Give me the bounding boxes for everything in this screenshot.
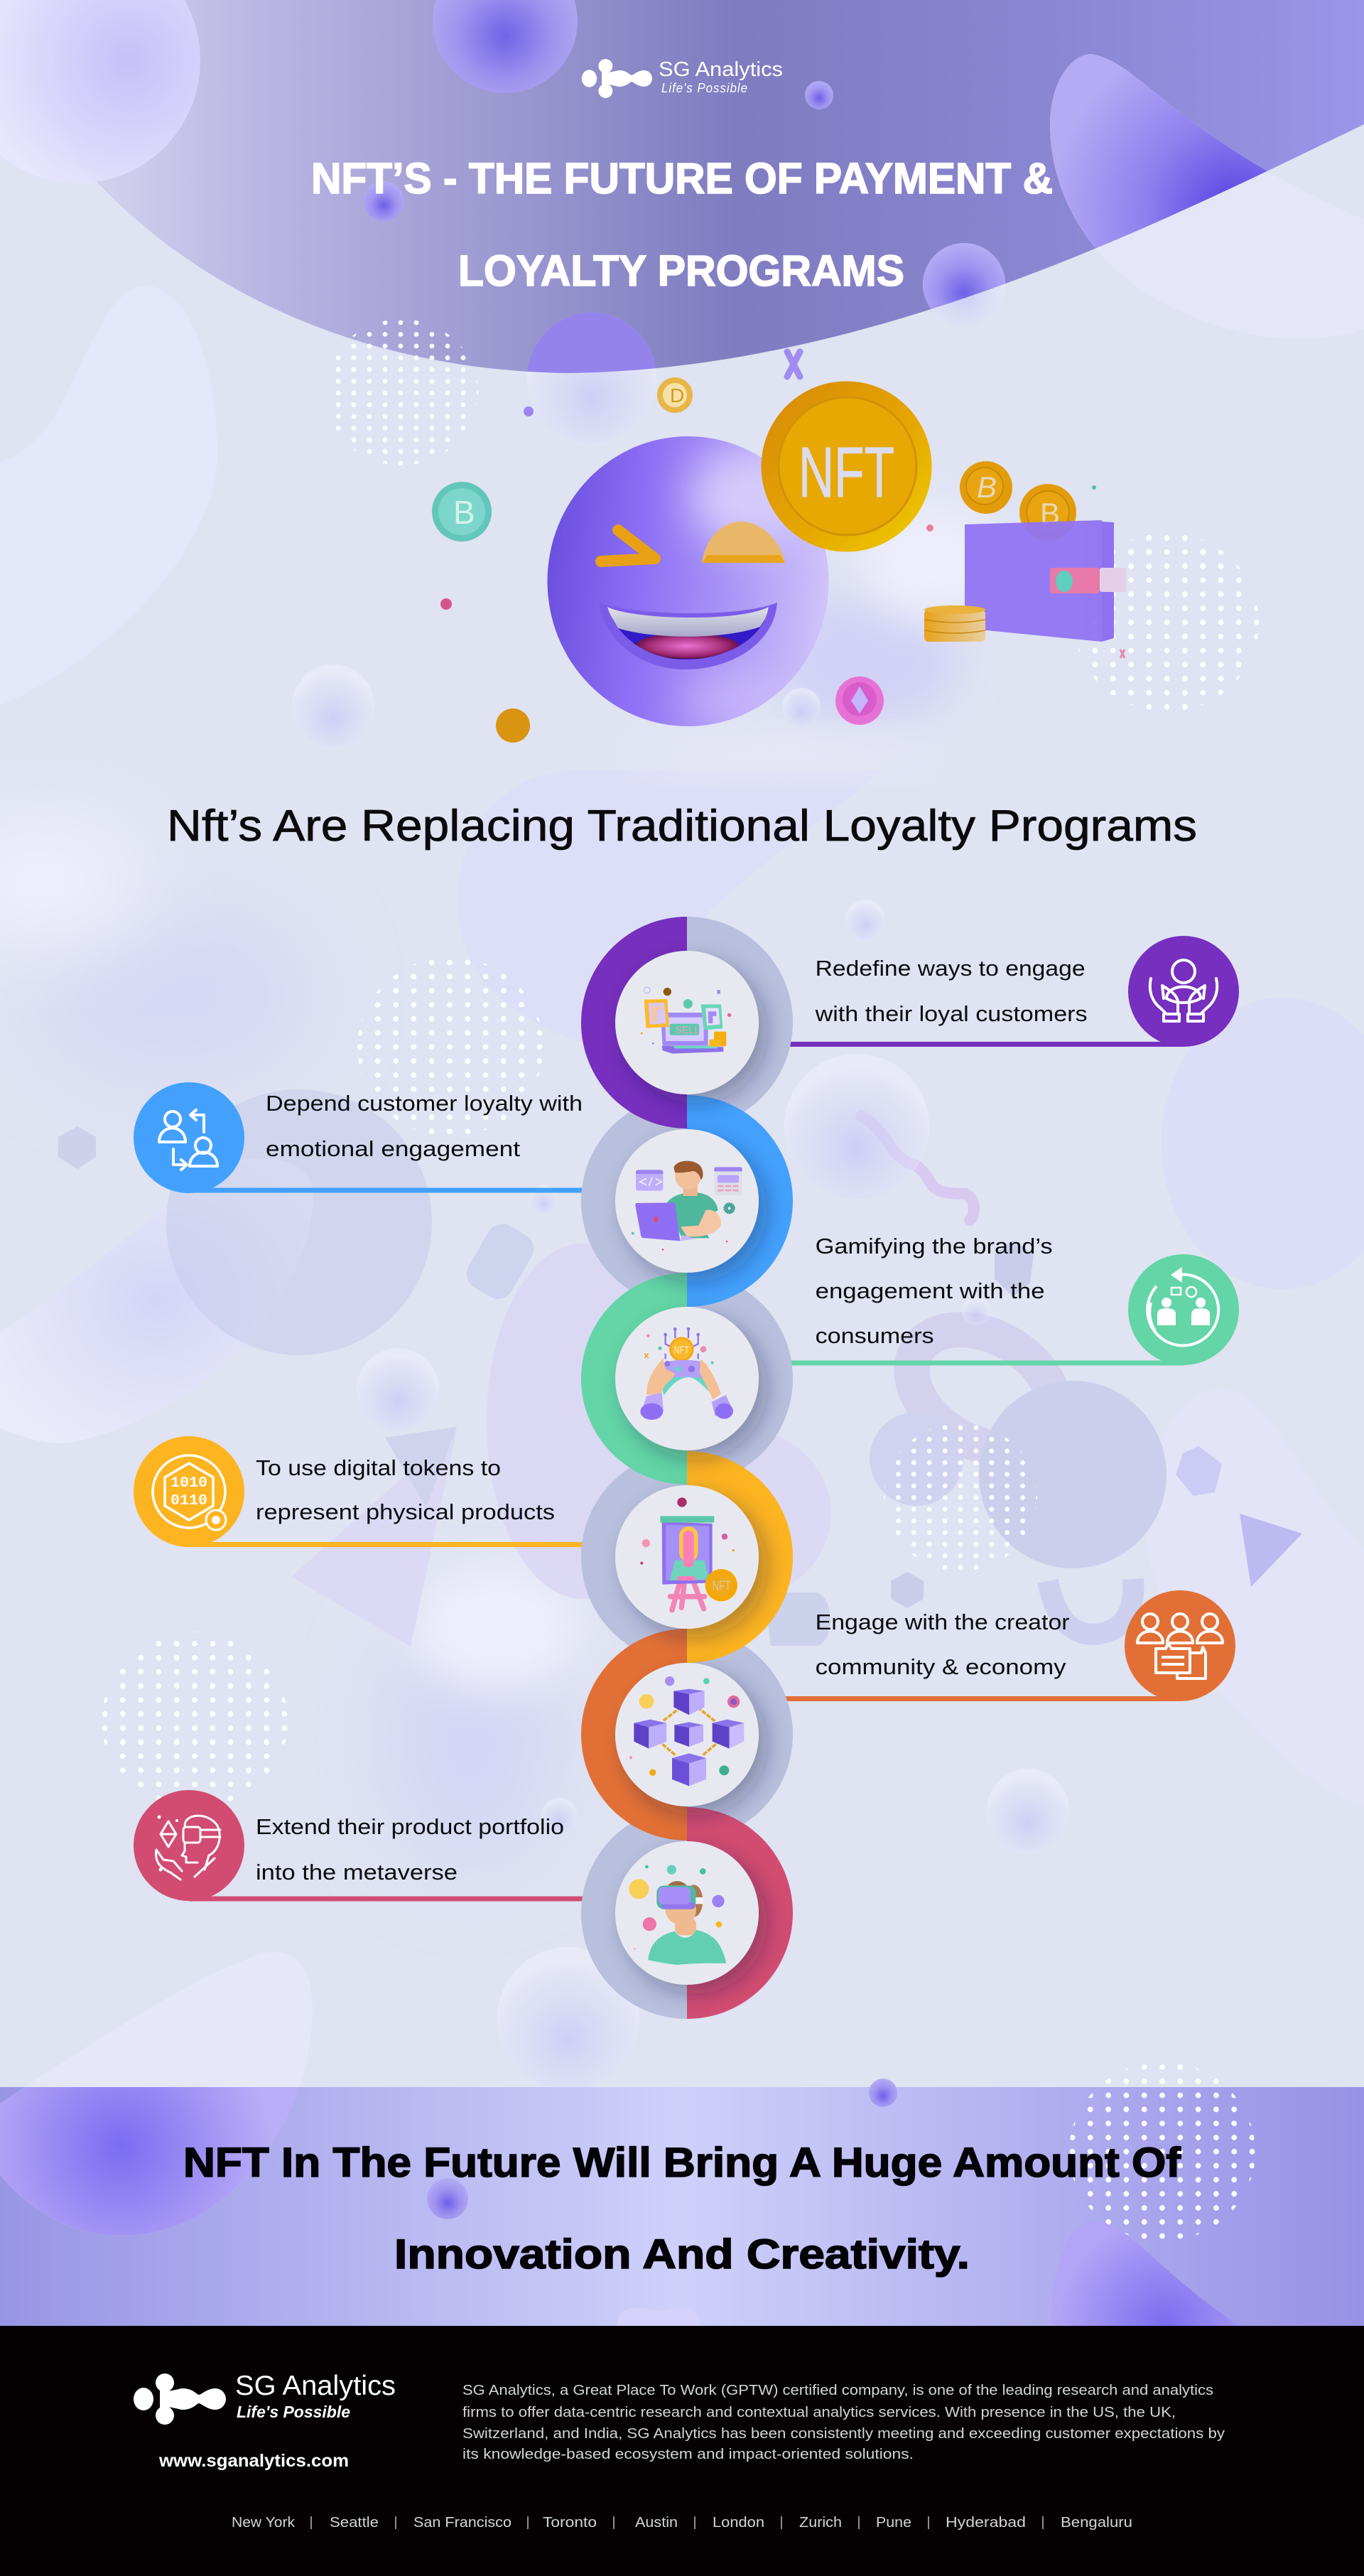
footer city list: Bengaluru xyxy=(1061,2515,1132,2531)
background shapes: hero section xyxy=(0,286,1002,770)
illustration: laptop selling NFTs: SELL xyxy=(676,1024,700,1035)
callout: depend: Depend customer loyalty with xyxy=(266,1091,583,1116)
top band blobs and bubbles xyxy=(0,0,1364,747)
callout: depend: emotional engagement xyxy=(266,1136,520,1161)
coin in wallet xyxy=(1019,484,1076,541)
footer description: SG Analytics, a Great Place To Work (GPTW) certified company, is one of the leading research and analytics xyxy=(462,2383,1213,2398)
illustration: gamepad held by hands xyxy=(640,1327,733,1420)
NFT coin: NFT xyxy=(799,433,894,512)
footer city list: San Francisco xyxy=(413,2515,512,2531)
logo tagline: Life's Possible xyxy=(661,81,748,95)
small bubble xyxy=(782,688,821,726)
illustration: gamepad held by hands: NFT xyxy=(674,1344,689,1356)
callout: creator: Engage with the creator xyxy=(816,1610,1070,1634)
callout: tokens: represent physical products xyxy=(256,1499,555,1524)
footer wordmark: SG Analytics xyxy=(235,2371,396,2401)
small gold coin xyxy=(657,377,693,413)
inner discs xyxy=(615,951,759,1985)
bottom band blobs xyxy=(0,1952,1240,2326)
wallet clasp xyxy=(1050,568,1126,593)
background shapes: middle section xyxy=(0,771,1364,2089)
callout: tokens: To use digital tokens to xyxy=(256,1455,501,1480)
callout: depend xyxy=(266,1091,583,1161)
callout: redefine: with their loyal customers xyxy=(814,1001,1088,1026)
footer description: its knowledge-based ecosystem and impact-oriented solutions. xyxy=(462,2447,914,2462)
callout: gamifying: engagement with the xyxy=(816,1278,1045,1303)
footer city list: London xyxy=(713,2515,764,2531)
callout: metaverse: Extend their product portfolio xyxy=(256,1814,564,1839)
callout: tokens xyxy=(256,1455,555,1524)
footer panel xyxy=(0,2326,1364,2576)
teal bitcoin coin: B xyxy=(453,494,475,531)
footer city list: Toronto xyxy=(543,2515,597,2531)
callout: gamifying: consumers xyxy=(816,1323,934,1348)
footer city list xyxy=(232,2515,1132,2531)
icon: caring hands (purple) xyxy=(1128,936,1239,1047)
footer city list: Pune xyxy=(876,2515,911,2531)
logo wordmark: SG Analytics xyxy=(659,58,783,81)
closing statement: NFT In The Future Will Bring A Huge Amount Of xyxy=(183,2140,1181,2186)
coin stack xyxy=(924,605,985,642)
section heading: Nft’s Are Replacing Traditional Loyalty Programs xyxy=(167,802,1197,851)
teal bitcoin coin xyxy=(432,482,492,541)
small gold coin: D xyxy=(670,384,684,406)
illustration: portrait on easel with NFT coin xyxy=(640,1497,737,1610)
footer tagline: Life's Possible xyxy=(237,2403,350,2421)
ethereum coin xyxy=(835,677,884,725)
callout: creator: community & economy xyxy=(816,1654,1066,1679)
callout texts xyxy=(256,956,1088,1885)
icon: digital tokens (yellow): 1010 xyxy=(170,1475,207,1492)
illustration: blockchain cubes xyxy=(629,1676,744,1786)
icon: digital tokens (yellow) xyxy=(134,1436,244,1547)
footer description: Switzerland, and India, SG Analytics has been consistently meeting and exceeding customer expectations by xyxy=(462,2426,1225,2442)
footer description xyxy=(462,2383,1225,2462)
callout: gamifying xyxy=(816,1234,1053,1348)
icon: digital tokens (yellow): 0110 xyxy=(170,1493,207,1509)
footer city list: New York xyxy=(232,2515,296,2531)
title xyxy=(311,154,1053,295)
decorative dots xyxy=(440,352,1125,743)
callout: redefine: Redefine ways to engage xyxy=(816,956,1086,981)
illustration: portrait on easel with NFT coin: NFT xyxy=(713,1579,731,1594)
illustration: laptop selling NFTs xyxy=(641,987,731,1054)
footer description: firms to offer data-centric research and contextual analytics services. With presence in the US, the UK, xyxy=(462,2405,1176,2420)
bottom band xyxy=(0,2087,1364,2326)
footer city list: Austin xyxy=(635,2515,678,2531)
callout: metaverse: into the metaverse xyxy=(256,1860,458,1885)
icon: gamified engagement (green) xyxy=(1128,1254,1239,1365)
icon: metaverse head (pink) xyxy=(134,1790,244,1901)
callout: redefine xyxy=(814,956,1088,1026)
closing statement xyxy=(183,2140,1181,2278)
footer city list: Seattle xyxy=(330,2515,379,2531)
top logo xyxy=(582,58,783,98)
footer website: www.sganalytics.com xyxy=(158,2451,349,2471)
footer city list: Zurich xyxy=(799,2515,842,2531)
icon: creator community (orange) xyxy=(1125,1590,1235,1701)
wallet xyxy=(965,520,1114,642)
NFT coin xyxy=(762,381,932,551)
callout: gamifying: Gamifying the brand’s xyxy=(816,1234,1053,1259)
callout: creator xyxy=(816,1610,1070,1679)
hero illustration xyxy=(432,352,1126,743)
coloured ring halves xyxy=(581,917,793,2019)
title: NFT’S - THE FUTURE OF PAYMENT & xyxy=(311,154,1053,203)
illustration: person wearing VR headset xyxy=(629,1865,726,1965)
gold bitcoin coin xyxy=(960,461,1012,514)
connector lines xyxy=(189,1042,1184,1902)
coin in wallet: B xyxy=(1040,497,1060,530)
central chain of rings xyxy=(581,917,793,2019)
callout: metaverse xyxy=(256,1814,564,1885)
top header band xyxy=(0,0,1364,373)
gold bitcoin coin: B xyxy=(977,470,997,504)
illustration: developer with laptop xyxy=(632,1161,742,1251)
closing statement: Innovation And Creativity. xyxy=(394,2231,970,2278)
grey ring halves xyxy=(581,917,793,2019)
title: LOYALTY PROGRAMS xyxy=(458,247,904,295)
footer city list: Hyderabad xyxy=(946,2515,1026,2531)
dot pattern fields xyxy=(102,319,1259,2241)
logo mark xyxy=(582,59,652,98)
icon: exchange between people (blue) xyxy=(134,1082,244,1193)
emoji face xyxy=(547,436,828,732)
footer logo mark xyxy=(134,2373,226,2425)
